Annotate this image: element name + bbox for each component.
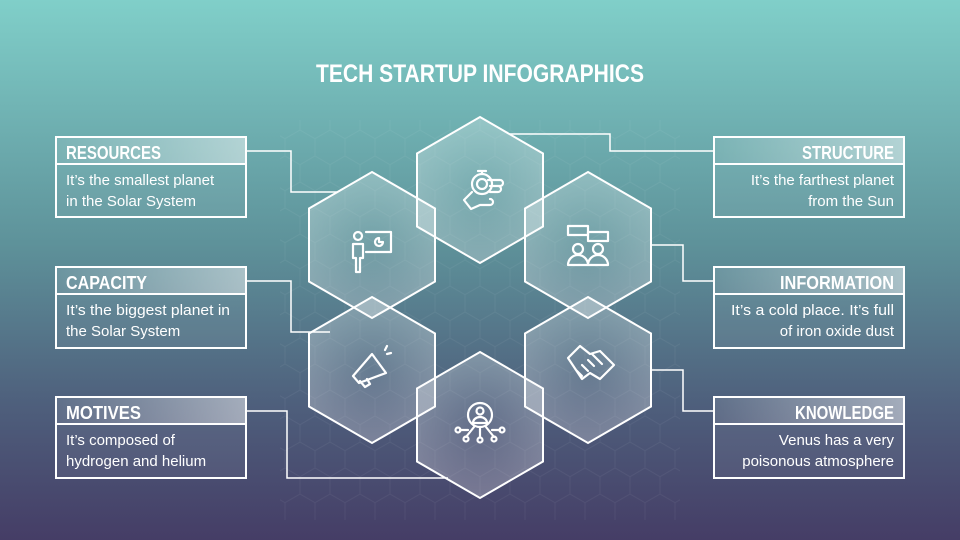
hexagon: top (417, 117, 543, 263)
box: motives: It’s composed of (66, 432, 176, 449)
icon: team chat (568, 226, 608, 265)
box: structure (714, 137, 904, 217)
hexagon: top-right (525, 172, 651, 318)
box: resources: RESOURCES (66, 143, 161, 163)
box: information: It’s a cold place. It’s full (731, 302, 894, 319)
hexagon: top-left (309, 172, 435, 318)
connector lines (246, 134, 714, 478)
box: resources: in the Solar System (66, 193, 196, 210)
box: capacity (56, 267, 246, 348)
box: information (714, 267, 904, 348)
box: information: INFORMATION (780, 273, 894, 293)
icon: network person (456, 403, 504, 442)
box: structure: It’s the farthest planet (751, 172, 895, 189)
box: capacity: It’s the biggest planet in (66, 302, 230, 319)
hexagons (309, 117, 651, 498)
box: knowledge: Venus has a very (779, 432, 894, 449)
icon: stopwatch hand (464, 171, 503, 209)
box: resources (56, 137, 246, 217)
icon: megaphone (353, 346, 391, 387)
hexagon: bottom-right (525, 297, 651, 443)
hexagon: bottom (417, 352, 543, 498)
hexagon: bottom-left (309, 297, 435, 443)
box: structure: from the Sun (808, 193, 894, 210)
box: capacity: the Solar System (66, 323, 180, 340)
box: knowledge: poisonous atmosphere (742, 453, 894, 470)
box: resources: It’s the smallest planet (66, 172, 215, 189)
box: capacity: CAPACITY (66, 273, 147, 293)
box: motives (56, 397, 246, 478)
box: knowledge (714, 397, 904, 478)
box: knowledge: KNOWLEDGE (795, 403, 894, 423)
icons (353, 171, 614, 442)
box: motives: hydrogen and helium (66, 453, 206, 470)
title: TECH STARTUP INFOGRAPHICS (316, 60, 644, 88)
icon: presenter (353, 232, 391, 272)
box: structure: STRUCTURE (802, 143, 894, 163)
box: information: of iron oxide dust (780, 323, 895, 340)
box: motives: MOTIVES (66, 403, 141, 423)
icon: handshake (568, 346, 614, 379)
